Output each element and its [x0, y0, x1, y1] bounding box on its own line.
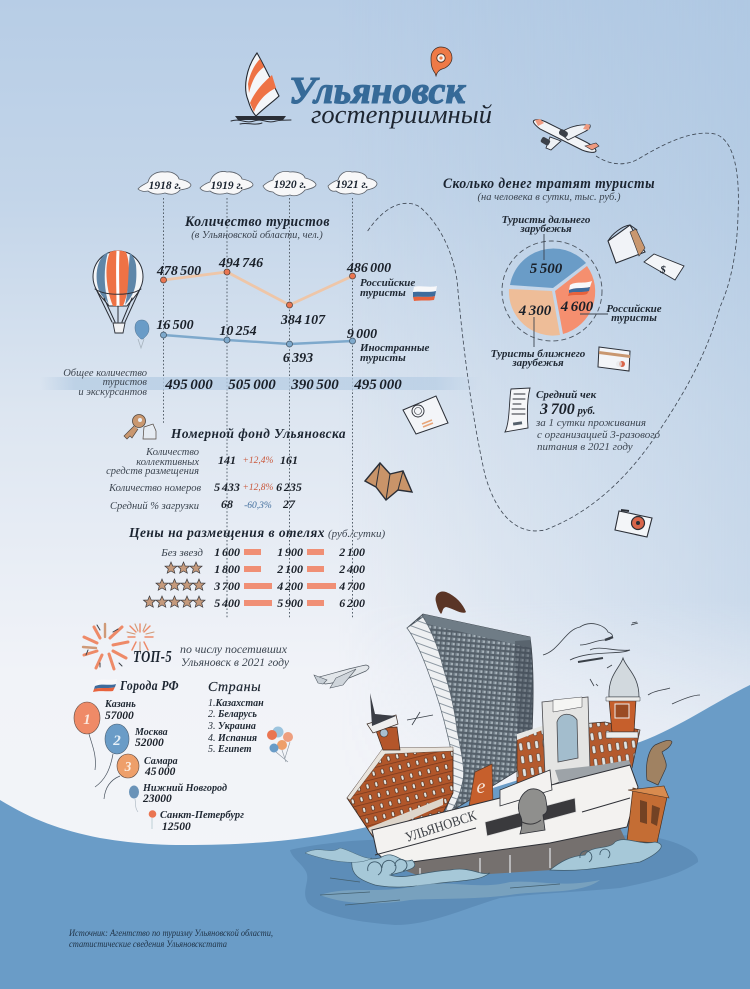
row no stars: Без звезд — [160, 547, 203, 559]
icon: key — [124, 414, 156, 439]
cloud 1919 — [200, 171, 253, 194]
top-5 heading: Ульяновск в 2021 году — [181, 655, 290, 669]
list: countries: 2. Беларусь — [208, 709, 257, 720]
line chart: russian tourists: 494 746 — [218, 256, 263, 271]
red tall sign — [468, 764, 493, 812]
icon: banknote — [644, 254, 684, 280]
balloon 2 Moscow: 52000 — [135, 737, 164, 749]
white hull: УЛЬЯНОВСК — [404, 808, 479, 846]
balloon 5 Saint Petersburg: Санкт-Петербург — [160, 810, 244, 821]
row 4 stars — [156, 579, 365, 593]
table: room stock: +12,8% — [243, 483, 274, 493]
pie labels: зарубежья — [511, 357, 564, 369]
line chart: foreign tourists: 16 500 — [156, 318, 194, 333]
balloon 2 Moscow: Москва — [134, 727, 168, 738]
legend: foreign tourists: Иностранные — [359, 342, 429, 354]
icon: hot air balloon — [93, 250, 143, 333]
balloon 4 Nizhny Novgorod: Нижний Новгород — [142, 783, 227, 794]
source note — [68, 928, 273, 949]
top-5 heading: по числу посетивших — [180, 642, 288, 656]
table: hotel prices — [144, 545, 365, 610]
heading: tourists count — [184, 214, 330, 241]
average check: с организацией 3-разового — [537, 429, 661, 441]
dome tower — [606, 658, 640, 765]
legend: russian tourists — [360, 277, 437, 301]
row 3 stars: 1 800 — [214, 562, 240, 576]
icon: bank card — [598, 347, 630, 371]
cloud 1918 — [138, 172, 191, 194]
balloon 3 Samara — [104, 754, 178, 799]
pie chart: spending: 4 300 — [518, 303, 552, 319]
heading: tourists count: Количество туристов — [184, 214, 330, 230]
list: countries: 1.Казахстан — [208, 698, 264, 709]
table: room stock: Количество номеров — [108, 483, 201, 494]
table: room stock: 141 — [218, 453, 236, 467]
top-5 heading — [133, 642, 290, 669]
list: countries: 5. Египет — [208, 744, 252, 755]
balloons: russian cities — [74, 699, 244, 833]
average check: 3 700 руб. — [539, 401, 595, 418]
hotel tower — [407, 591, 533, 817]
balloon 3 Samara: 3 — [124, 759, 132, 774]
cloud 1919: 1919 г. — [211, 180, 243, 192]
heading: hotel prices: Цены на размещения в отелях — [128, 526, 325, 541]
icon: balloon cluster — [267, 726, 293, 762]
balloon 4 Nizhny Novgorod: 23000 — [142, 793, 172, 805]
line chart: foreign tourists: 10 254 — [219, 324, 257, 339]
totals band — [40, 368, 480, 398]
pie labels — [491, 214, 662, 369]
line chart: foreign tourists: 9 000 — [347, 327, 377, 342]
icon: passport — [403, 396, 448, 434]
red tall sign: е — [477, 776, 486, 798]
heading: room stock: Номерной фонд Ульяновска — [170, 427, 346, 442]
table: room stock: Количество — [145, 447, 199, 458]
balloon 3 Samara: 45 000 — [144, 766, 176, 778]
average check: за 1 сутки проживания — [535, 417, 646, 429]
heading: spending — [443, 176, 655, 203]
line chart: russian tourists: 478 500 — [156, 264, 201, 279]
row 3 stars: 2 400 — [338, 562, 365, 576]
line chart: foreign tourists — [156, 318, 377, 366]
totals band: 390 500 — [290, 377, 339, 393]
icon: small airplane — [314, 665, 369, 688]
icon: receipt — [505, 388, 530, 432]
central white block — [542, 697, 590, 785]
list: countries — [207, 680, 264, 755]
balloon 1 Kazan: 57000 — [105, 710, 134, 722]
row 5 stars: 6 200 — [339, 596, 365, 610]
table: room stock: средств размещения — [106, 466, 199, 477]
row 5 stars: 5 400 — [214, 596, 240, 610]
icon: fireworks — [83, 624, 154, 669]
icon: wallet — [608, 225, 645, 263]
right red building — [517, 658, 640, 788]
statue column — [627, 740, 672, 843]
left red building — [347, 693, 453, 837]
logo: sailboat — [231, 53, 291, 124]
subtitle: гостеприимный — [311, 100, 492, 129]
cloud 1920: 1920 г. — [274, 179, 306, 191]
flight path dashed — [367, 133, 738, 531]
legend: foreign tourists: туристы — [360, 352, 406, 364]
row no stars: 1 900 — [277, 545, 303, 559]
balloon 1 Kazan: Казань — [104, 699, 136, 710]
legend: russian tourists: туристы — [360, 287, 406, 299]
line chart: foreign tourists: 6 393 — [283, 351, 313, 366]
row 3 stars — [165, 562, 365, 576]
line chart: russian tourists: 384 107 — [280, 313, 326, 328]
icon: camera — [615, 510, 652, 537]
table: room stock: 27 — [282, 497, 296, 511]
table: room stock: 68 — [221, 497, 233, 511]
icon: small blue balloon — [135, 320, 149, 348]
row 4 stars: 3 700 — [213, 579, 240, 593]
balloon 1 Kazan — [74, 699, 136, 770]
left tower — [367, 693, 400, 750]
cloud 1918: 1918 г. — [149, 180, 181, 192]
ship underside — [390, 828, 628, 878]
balloon 1 Kazan: 1 — [83, 712, 91, 728]
illustration: ship of Ulyanovsk — [305, 591, 672, 905]
table: room stock: 6 235 — [276, 480, 302, 494]
cloud 1920 — [263, 171, 316, 196]
heading: russian cities: Города РФ — [119, 678, 179, 693]
heading: spending: Сколько денег тратят туристы — [443, 176, 655, 192]
pie labels: Туристы ближнего — [491, 348, 586, 360]
balloon 2 Moscow: 2 — [112, 733, 121, 749]
pie flag — [568, 281, 592, 296]
line chart: russian tourists — [156, 256, 391, 328]
pie chart: spending: 5 500 — [530, 261, 563, 277]
line chart: russian tourists: 486 000 — [346, 261, 391, 276]
white hull — [372, 765, 638, 865]
row 5 stars: 5 900 — [277, 596, 303, 610]
list: countries: 4. Испания — [208, 733, 257, 744]
waves — [305, 840, 661, 905]
heading: hotel prices: (руб./сутки) — [328, 528, 386, 540]
icon: airplane — [533, 119, 599, 152]
legend: foreign tourists — [359, 342, 429, 364]
balloon 4 Nizhny Novgorod — [129, 783, 227, 812]
totals band: Общее количество — [63, 368, 147, 379]
table: room stock: +12,4% — [243, 456, 274, 466]
source note: статистические сведения Ульяновскстата — [69, 939, 227, 949]
title: Ульяновск — [289, 70, 467, 112]
heading: spending: (на человека в сутки, тыс. руб.) — [478, 192, 621, 203]
row 5 stars — [144, 596, 365, 610]
source note: Источник: Агентство по туризму Ульяновской области, — [68, 928, 273, 938]
table: room stock: 161 — [280, 453, 298, 467]
timeline dashed lines — [164, 198, 352, 618]
average check — [535, 389, 661, 453]
average check: Средний чек — [536, 389, 597, 401]
table: room stock: 5 433 — [214, 480, 240, 494]
pie labels: зарубежья — [519, 223, 572, 235]
totals band: туристов — [103, 377, 147, 388]
table: room stock: коллективных — [136, 457, 199, 468]
pie labels: Туристы дальнего — [502, 214, 591, 226]
row no stars: 1 600 — [214, 545, 240, 559]
pie labels: Российские — [606, 303, 662, 315]
balloon 3 Samara: Самара — [144, 756, 178, 767]
cloud 1921 — [328, 171, 377, 194]
top-5 heading: ТОП-5 — [133, 647, 172, 666]
list: countries: 3. Украина — [207, 721, 256, 732]
clouds: years — [138, 171, 377, 196]
totals band: и экскурсантов — [78, 387, 147, 398]
table: room stock — [106, 447, 302, 512]
average check: питания в 2021 году — [537, 441, 633, 453]
pie chart: spending: 4 600 — [560, 299, 594, 315]
row no stars: 2 100 — [338, 545, 365, 559]
balloon 2 Moscow — [95, 724, 168, 787]
legend: russian tourists: Российские — [360, 277, 415, 289]
heading: tourists count: (в Ульяновской области, чел.) — [191, 230, 323, 241]
row 3 stars: 2 100 — [276, 562, 303, 576]
totals band: 495 000 — [353, 377, 402, 393]
row 4 stars: 4 700 — [338, 579, 365, 593]
logo: map pin — [431, 47, 452, 76]
row no stars — [160, 545, 365, 559]
row 4 stars: 4 200 — [276, 579, 303, 593]
illustration: sky clouds and birds — [407, 622, 700, 725]
balloon 5 Saint Petersburg: 12500 — [162, 821, 191, 833]
heading: russian cities — [93, 678, 179, 693]
pie labels: туристы — [611, 312, 657, 324]
icon: map — [365, 463, 412, 500]
list: countries: Страны — [208, 680, 261, 695]
Lenin bust relief — [518, 789, 547, 834]
cloud 1921: 1921 г. — [336, 179, 368, 191]
totals band: 495 000 — [164, 377, 213, 393]
balloon 5 Saint Petersburg — [149, 810, 244, 833]
table: room stock: Средний % загрузки — [110, 501, 199, 512]
totals band: 505 000 — [228, 377, 276, 393]
icon: banknote: $ — [659, 264, 666, 276]
table: room stock: -60,3% — [244, 501, 272, 511]
pie chart: spending — [502, 234, 608, 347]
